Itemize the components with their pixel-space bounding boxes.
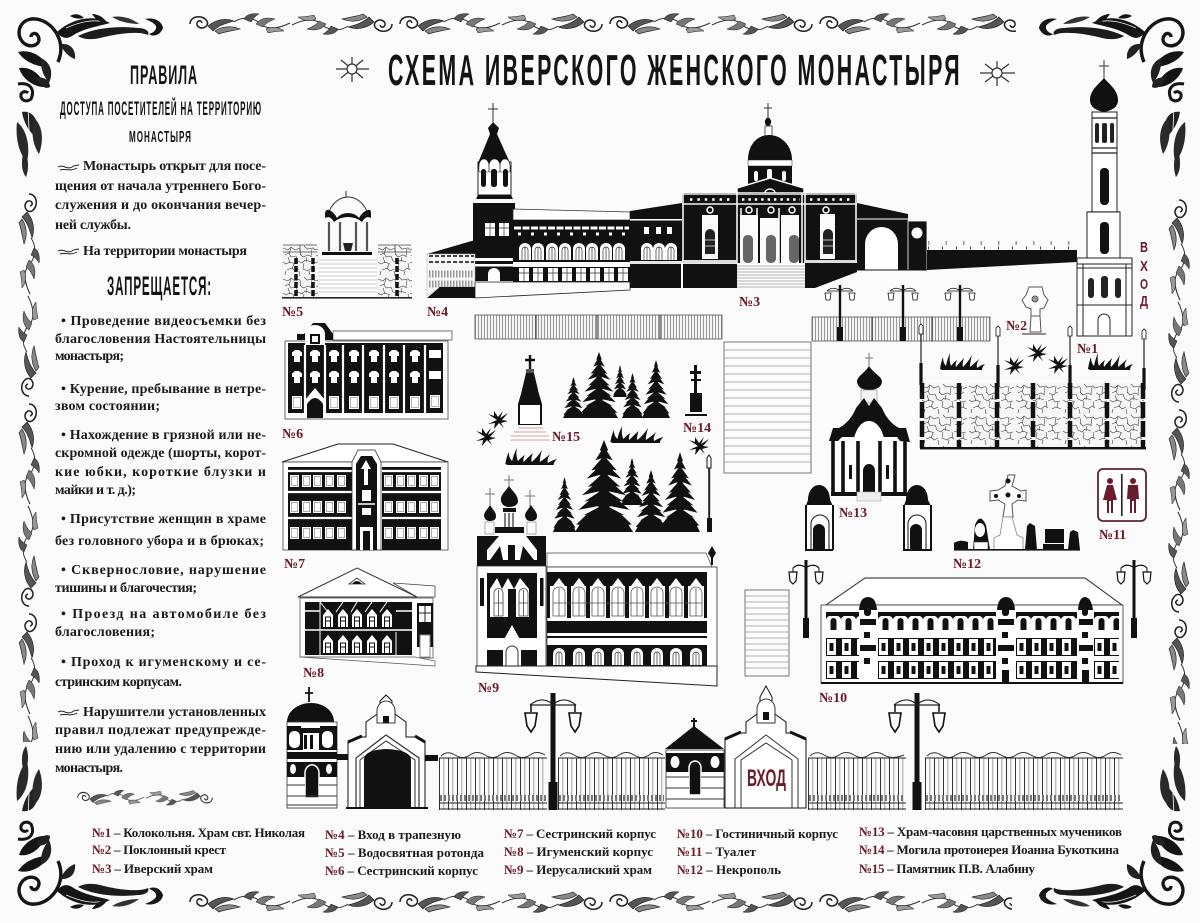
legend column 3 xyxy=(504,826,656,877)
monument: №2 worship cross xyxy=(1022,287,1048,334)
legend column 5 xyxy=(859,824,1122,876)
text: prohibitions list: монастыря; xyxy=(55,349,124,364)
icon: №12 necropolis xyxy=(954,475,1080,551)
building: №9 Jerusalem church xyxy=(476,475,717,686)
leaf xyxy=(1004,357,1024,375)
text: opening hours: служения и до окончания вечер- xyxy=(55,198,266,213)
legend column 1: №2 – Поклонный крест xyxy=(92,842,227,857)
text: vertical entrance label: Д xyxy=(1140,293,1148,310)
gate row: fence section xyxy=(558,752,665,810)
subheading: monastery: МОНАСТЫРЯ xyxy=(129,129,192,146)
leaf xyxy=(1048,356,1068,374)
upper fence left xyxy=(475,315,722,339)
wall lamp xyxy=(1142,329,1146,390)
text: on the territory: На территории монастыря xyxy=(83,244,247,259)
legend column 4: №11 – Туалет xyxy=(677,844,757,859)
text: prohibitions list: • Нахождение в грязной или не- xyxy=(61,428,266,443)
text: opening hours: щения от начала утреннего Бого- xyxy=(55,179,266,194)
small staircase xyxy=(745,590,789,676)
text: entrance sign: ВХОД xyxy=(747,765,786,792)
legend column 3: №8 – Игуменский корпус xyxy=(504,844,653,859)
text: prohibitions list: • Сквернословие, нарушение xyxy=(61,563,266,578)
label: №10 xyxy=(819,691,847,706)
church left wing xyxy=(630,203,737,289)
spruce group upper xyxy=(563,352,670,418)
legend column 2: №6 – Сестринский корпус xyxy=(325,863,478,878)
gate row: tower xyxy=(287,687,349,808)
text: prohibitions list: тишины и благочестия; xyxy=(55,581,197,596)
gate row: gate with arch xyxy=(346,695,438,809)
border: top-right corner flourish xyxy=(1039,14,1185,177)
legend column 5: №15 – Памятник П.В. Алабину xyxy=(859,861,1036,876)
grass xyxy=(940,353,985,370)
low wall to bell tower xyxy=(927,243,1077,270)
text: violators: правил подлежат предупрежде- xyxy=(55,723,266,738)
church stairs xyxy=(737,263,806,288)
wall lamp xyxy=(996,326,1000,387)
text: prohibitions list: • Проезд на автомобиле без xyxy=(61,607,266,622)
label: №8 xyxy=(303,666,324,681)
main wing xyxy=(547,553,712,567)
stone wall xyxy=(920,383,1146,449)
label: №12 xyxy=(953,557,981,572)
building: №8 abbess building xyxy=(298,568,435,666)
leaf xyxy=(689,437,709,455)
gate row: fence section xyxy=(808,752,906,810)
text: violators: монастыря. xyxy=(55,761,123,776)
legend column 5: №14 – Могила протоиерея Иоанна Букоткина xyxy=(859,842,1120,857)
tower facade xyxy=(477,536,546,566)
panel: rules text xyxy=(55,60,266,806)
gate row: fence section xyxy=(439,752,547,810)
label: №3 xyxy=(739,295,760,310)
text: prohibitions list: • Присутствие женщин в храме xyxy=(61,512,266,527)
monument: №15 Alabin xyxy=(511,355,550,440)
text: vertical entrance label: Х xyxy=(1140,258,1148,275)
border: bottom-left corner flourish xyxy=(17,746,163,909)
text: opening hours: ней службы. xyxy=(55,218,131,233)
upper fence right xyxy=(812,317,990,341)
legend column 3: №9 – Иерусалиский храм xyxy=(504,862,652,877)
gate row: fence section xyxy=(925,752,1123,810)
text: vertical entrance label: В xyxy=(1140,239,1148,256)
building: №1 bell tower xyxy=(1077,60,1132,336)
label: №7 xyxy=(284,557,305,572)
label: №4 xyxy=(427,305,448,320)
legend column 2: №5 – Водосвятная ротонда xyxy=(325,845,484,860)
gate row: small house xyxy=(665,718,724,808)
monument: №14 grave cross xyxy=(685,365,707,416)
legend column 1 xyxy=(92,825,305,876)
porch of refectory xyxy=(427,240,475,298)
text: vertical entrance label: О xyxy=(1140,276,1148,293)
legend column 4: №10 – Гостиничный корпус xyxy=(677,826,838,841)
legend column 3: №7 – Сестринский корпус xyxy=(504,826,656,841)
text: opening hours xyxy=(55,159,266,233)
legend column 4: №12 – Некрополь xyxy=(677,862,781,877)
wall lamp xyxy=(919,324,923,385)
text: prohibitions list: звом состоянии; xyxy=(55,399,160,414)
text: vertical entrance label xyxy=(1140,239,1148,310)
building: №10 hotel xyxy=(821,578,1123,684)
label: №14 xyxy=(683,421,711,436)
panel: rules text: ЗАПРЕЩАЕТСЯ: xyxy=(107,271,212,301)
church main facade xyxy=(682,193,857,263)
border: bottom ornament band xyxy=(186,890,1012,914)
label: №6 xyxy=(282,427,303,442)
grass xyxy=(610,426,663,443)
text: prohibitions list: • Проход к игуменскому и се- xyxy=(61,655,266,670)
legend column 1: №3 – Иверский храм xyxy=(92,861,213,876)
text: prohibitions list: стринским корпусам. xyxy=(55,675,182,690)
lamp xyxy=(945,285,975,341)
legend column 1: №1 – Колокольня. Храм свт. Николая xyxy=(92,825,305,840)
label: №15 xyxy=(552,430,580,445)
lamp xyxy=(1117,560,1151,638)
lamp xyxy=(789,560,823,638)
icon: title ornament right xyxy=(980,61,1015,86)
label: №9 xyxy=(478,681,499,696)
label: №1 xyxy=(1077,342,1098,357)
text: prohibitions list: кие юбки, короткие блузки и xyxy=(55,465,266,480)
divider ornament xyxy=(75,789,215,806)
domes xyxy=(484,475,537,533)
legend column 2 xyxy=(325,827,484,878)
grass xyxy=(505,448,557,465)
text: violators: Нарушители установленных xyxy=(83,705,266,720)
leaf xyxy=(1027,344,1047,362)
gate row: large lamp xyxy=(889,693,945,810)
text: prohibitions list: благословения Настоятельницы xyxy=(55,332,266,347)
label: №2 xyxy=(1006,319,1027,334)
church dome xyxy=(737,103,804,193)
text: violators: нию или удалению с территории xyxy=(55,742,266,757)
building: №5 water rotunda xyxy=(282,191,412,299)
lamp post xyxy=(707,455,712,532)
border: top ornament band xyxy=(186,12,1016,36)
legend column 4 xyxy=(677,826,838,877)
grass xyxy=(1088,353,1133,370)
icon: №11 toilet xyxy=(1098,469,1146,521)
building: №7 sisters' building xyxy=(282,444,448,550)
text: prohibitions list: скромной одежде (шорты, корот- xyxy=(55,446,266,461)
lamp xyxy=(825,285,855,341)
text: prohibitions list xyxy=(55,314,266,690)
building: №6 sisters' building xyxy=(285,323,452,419)
central staircase xyxy=(724,342,811,473)
text: violators xyxy=(55,705,266,776)
panel: rules text: ПРАВИЛА xyxy=(130,60,198,90)
gate row: large lamp xyxy=(525,693,581,810)
leaf xyxy=(488,411,508,429)
text: prohibitions list: благословения; xyxy=(55,625,155,640)
spruce group lower xyxy=(553,440,700,532)
text: ДОСТУПА ПОСЕТИТЕЛЕЙ НА ТЕРРИТОРИЮ xyxy=(60,98,262,120)
legend column 5: №13 – Храм-часовня царственных мучеников xyxy=(859,824,1122,839)
leaf xyxy=(476,428,496,446)
lamp xyxy=(888,285,918,341)
border: top-left corner flourish xyxy=(17,14,163,177)
building: №3 Iveron church and №4 refectory xyxy=(427,103,1077,298)
bell tower of refectory xyxy=(473,103,515,282)
text: prohibitions list: • Курение, пребывание в нетре- xyxy=(61,382,266,397)
label: №11 xyxy=(1099,528,1126,543)
wall lamp xyxy=(1068,326,1072,387)
chapel: №13 xyxy=(805,353,932,550)
gate row: entrance gate xyxy=(725,686,806,808)
icon: title ornament left xyxy=(336,57,369,82)
text: prohibitions list: без головного убора и в брюках; xyxy=(55,534,264,549)
border: bottom-right corner flourish xyxy=(1039,746,1185,909)
text: prohibitions list: • Проведение видеосъемки без xyxy=(61,314,266,329)
border: left ornament band xyxy=(17,190,41,742)
refectory wing xyxy=(475,209,630,298)
label: №13 xyxy=(839,506,867,521)
border: right ornament band xyxy=(1167,196,1191,744)
legend column 2: №4 – Вход в трапезную xyxy=(325,827,461,842)
text: opening hours: Монастырь открыт для посе- xyxy=(83,159,266,174)
church right wing and gate xyxy=(805,203,927,288)
label: №5 xyxy=(282,305,303,320)
text: prohibitions list: майки и т. д.); xyxy=(55,483,136,498)
